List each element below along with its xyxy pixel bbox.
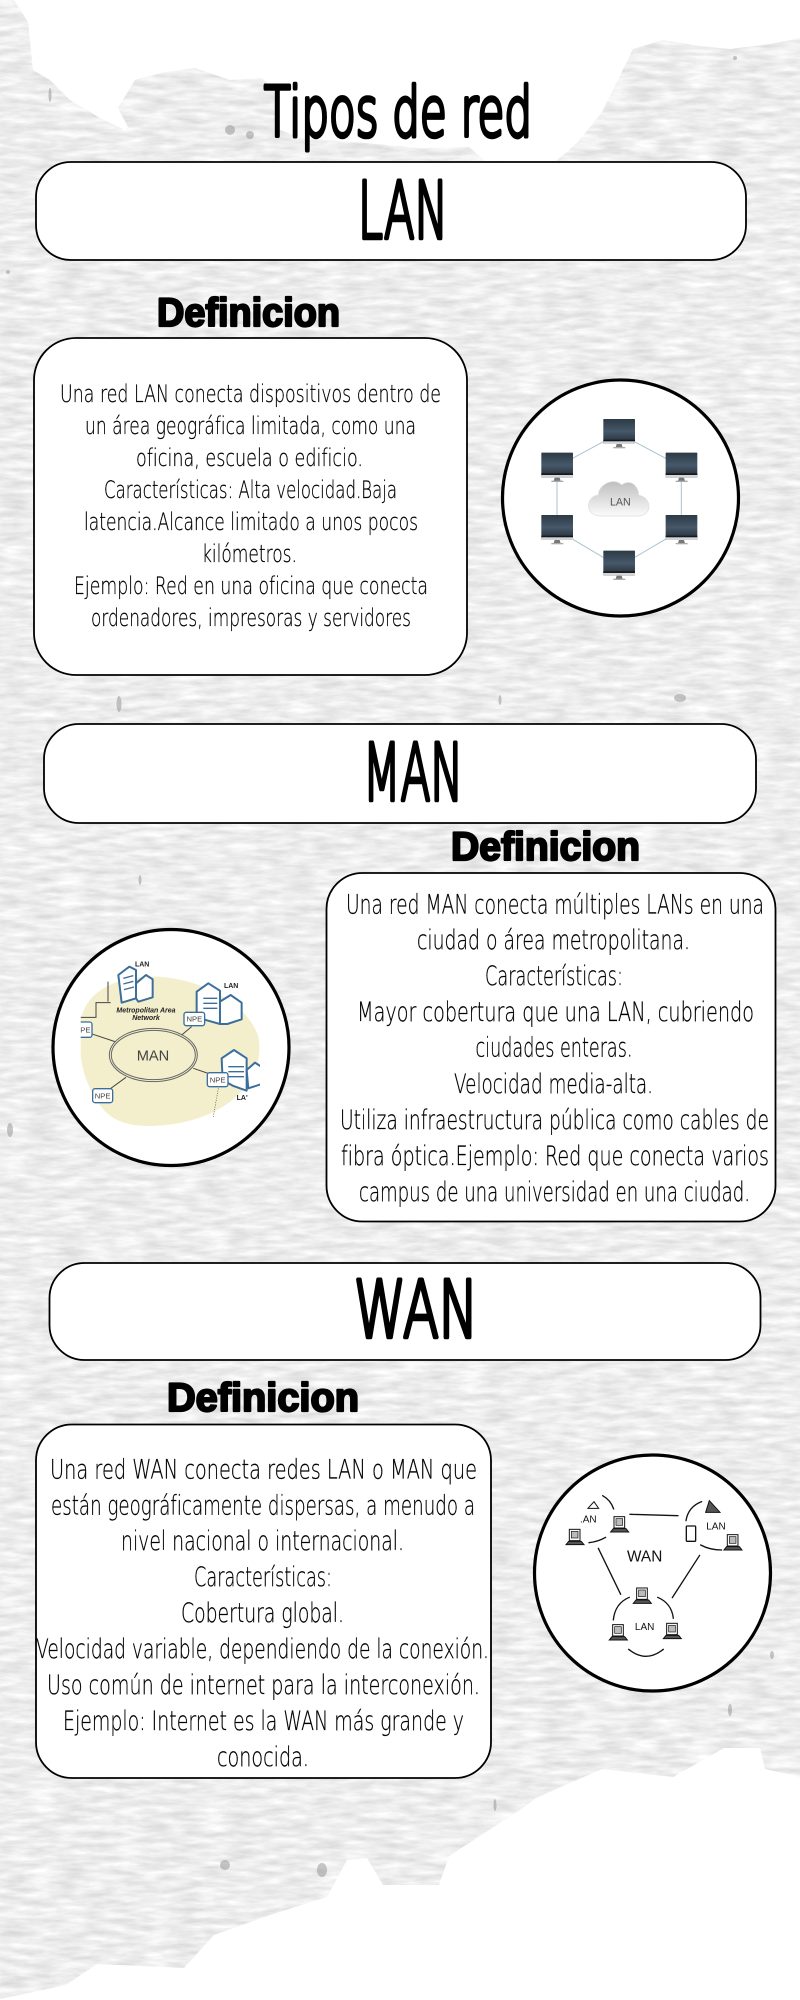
WAN heading bar: [50, 1263, 760, 1360]
panel: LAN section: [34, 162, 746, 675]
MAN network diagram: Metropolitan Area: [116, 1008, 176, 1015]
LAN heading bar: [36, 162, 746, 260]
panel: WAN section: [36, 1263, 770, 1778]
WAN heading bar: WAN: [354, 1266, 478, 1356]
MAN network diagram: NPE: [186, 1014, 202, 1023]
MAN text panel: ciudades enteras.: [476, 1032, 632, 1064]
WAN network diagram: [534, 1455, 770, 1691]
WAN text panel: Ejemplo: Internet es la WAN más grande y: [63, 1706, 464, 1737]
MAN definicion heading: Definicion: [451, 825, 640, 869]
building cluster: [118, 967, 264, 1091]
LAN text panel: Características: Alta velocidad.Baja: [104, 476, 397, 504]
WAN text panel: nivel nacional o internacional.: [121, 1526, 404, 1557]
MAN heading bar: MAN: [363, 729, 463, 819]
WAN network diagram: .AN: [580, 1515, 597, 1526]
MAN network diagram: LAN: [135, 962, 149, 969]
WAN text panel: Una red WAN conecta redes LAN o MAN que: [50, 1454, 477, 1486]
WAN text panel: están geográficamente dispersas, a menudo a: [51, 1490, 475, 1522]
title: Tipos de red: [264, 73, 532, 153]
LAN ring network diagram: [502, 380, 738, 616]
WAN text panel: conocida.: [217, 1742, 309, 1773]
MAN network diagram: Network: [132, 1015, 161, 1022]
WAN network diagram: WAN: [627, 1549, 662, 1566]
WAN text panel: Velocidad variable, dependiendo de la conexión.: [36, 1634, 489, 1665]
LAN text panel: kilómetros.: [202, 540, 297, 568]
torn white paper: top: [14, 0, 800, 161]
WAN text panel: Uso común de internet para la interconexión.: [47, 1670, 480, 1701]
MAN network diagram: NPE: [75, 1025, 91, 1034]
LAN text panel: [34, 338, 467, 675]
torn white paper: bottom: [0, 1748, 800, 2000]
LAN text panel: latencia.Alcance limitado a unos pocos: [84, 508, 418, 536]
WAN text panel: Características:: [194, 1562, 332, 1593]
MAN network diagram: LA': [237, 1095, 248, 1102]
MAN network diagram: NPE: [95, 1091, 111, 1100]
MAN network diagram: [53, 930, 289, 1166]
MAN text panel: Características:: [485, 961, 623, 992]
MAN text panel: Velocidad media-alta.: [454, 1069, 653, 1100]
MAN text panel: ciudad o área metropolitana.: [417, 925, 690, 956]
MAN network diagram: MAN: [137, 1049, 169, 1065]
panel: MAN section: [44, 724, 776, 1222]
LAN definicion heading: Definicion: [157, 291, 340, 335]
WAN text panel: [36, 1424, 491, 1778]
LAN ring network diagram: LAN: [610, 497, 631, 509]
MAN network diagram: NPE: [210, 1075, 226, 1084]
LAN text panel: Una red LAN conecta dispositivos dentro de: [60, 380, 441, 408]
LAN text panel: oficina, escuela o edificio.: [136, 444, 363, 472]
LAN text panel: un área geográfica limitada, como una: [85, 412, 416, 440]
MAN text panel: [326, 873, 776, 1222]
MAN network diagram: LAN: [224, 983, 238, 990]
LAN text panel: ordenadores, impresoras y servidores: [91, 604, 411, 632]
LAN heading bar: LAN: [358, 167, 448, 257]
WAN network diagram: LAN: [706, 1521, 726, 1532]
WAN network diagram: LAN: [635, 1622, 654, 1633]
LAN text panel: Ejemplo: Red en una oficina que conecta: [74, 572, 428, 600]
WAN definicion heading: Definicion: [167, 1376, 359, 1420]
MAN heading bar: [44, 724, 756, 823]
WAN text panel: Cobertura global.: [181, 1598, 344, 1629]
